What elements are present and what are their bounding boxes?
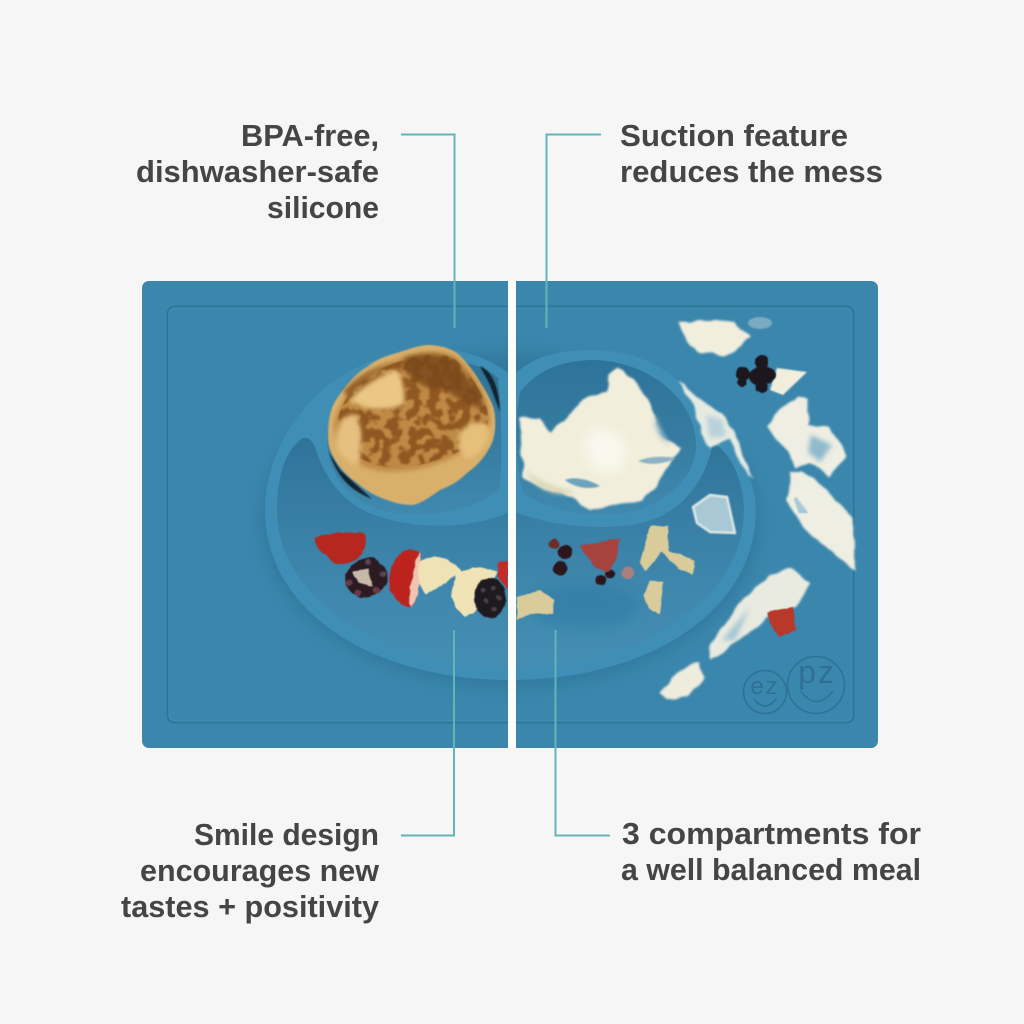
connector: BPA-free — [401, 134, 454, 328]
mid brown — [334, 352, 490, 472]
banana remains — [644, 580, 664, 614]
lower compartment — [277, 438, 744, 667]
banana remains — [517, 590, 555, 620]
translucent patch, top — [748, 317, 772, 329]
strawberry half — [389, 549, 421, 607]
connector: smile — [401, 630, 454, 836]
centre divider — [508, 280, 516, 749]
strawberry on mat — [767, 607, 796, 637]
label: BPA-free silicone — [136, 119, 379, 225]
label: BPA-free silicone: dishwasher-safe — [136, 155, 379, 189]
label: smile design: encourages new — [140, 854, 379, 888]
strawberry remains — [580, 538, 620, 572]
label: suction feature: reduces the mess — [620, 155, 883, 189]
blackberry half — [345, 558, 387, 598]
light patches — [349, 370, 405, 410]
plate rim — [265, 349, 756, 680]
smile plate — [260, 349, 760, 688]
pancake base — [328, 345, 495, 505]
banana slice — [418, 557, 462, 594]
strawberry wedge — [314, 533, 366, 565]
berry piece — [622, 567, 634, 579]
logo — [744, 654, 844, 714]
pancake — [328, 345, 495, 505]
berries on mat — [736, 355, 776, 393]
label: BPA-free silicone: silicone — [267, 191, 379, 225]
lower streak — [707, 568, 812, 658]
right bowl — [517, 360, 696, 515]
banana remains — [640, 526, 695, 575]
translucent drop — [693, 495, 735, 533]
dark crust — [404, 354, 485, 410]
bowl shadow — [329, 366, 500, 499]
fruit pieces, left half — [314, 533, 508, 618]
berry smear — [770, 368, 807, 395]
bowl yogurt — [519, 369, 680, 510]
right smear lower — [787, 470, 854, 570]
connector: suction — [546, 134, 601, 328]
stain — [530, 584, 640, 628]
plate shadow — [260, 352, 760, 688]
mat smear, top — [678, 320, 750, 357]
browned area — [338, 355, 488, 468]
label: smile design: tastes + positivity — [121, 890, 379, 924]
label: suction feature: Suction feature — [620, 119, 848, 153]
strawberry piece — [497, 560, 508, 590]
logo: ez — [750, 673, 780, 700]
bottom smear — [658, 663, 705, 700]
yogurt smears — [519, 317, 854, 700]
label: smile design — [121, 818, 379, 924]
left bowl — [327, 360, 501, 515]
small circle — [744, 670, 786, 714]
blackberry — [474, 578, 506, 618]
label: suction feature — [620, 119, 883, 189]
silicone placemat — [142, 281, 878, 748]
connector: compartments — [556, 630, 610, 836]
berry remains — [549, 539, 615, 585]
label: compartments: a well balanced meal — [621, 853, 921, 887]
rim smear — [677, 380, 753, 480]
banana slice — [452, 568, 497, 617]
large circle — [788, 656, 844, 714]
label: compartments — [621, 817, 921, 887]
label: smile design: Smile design — [194, 818, 379, 852]
label: compartments: 3 compartments for — [622, 817, 921, 851]
food remains, right half — [517, 526, 695, 628]
right smear upper — [765, 397, 847, 477]
label: BPA-free silicone: BPA-free, — [241, 119, 379, 153]
logo: pz — [798, 654, 836, 690]
